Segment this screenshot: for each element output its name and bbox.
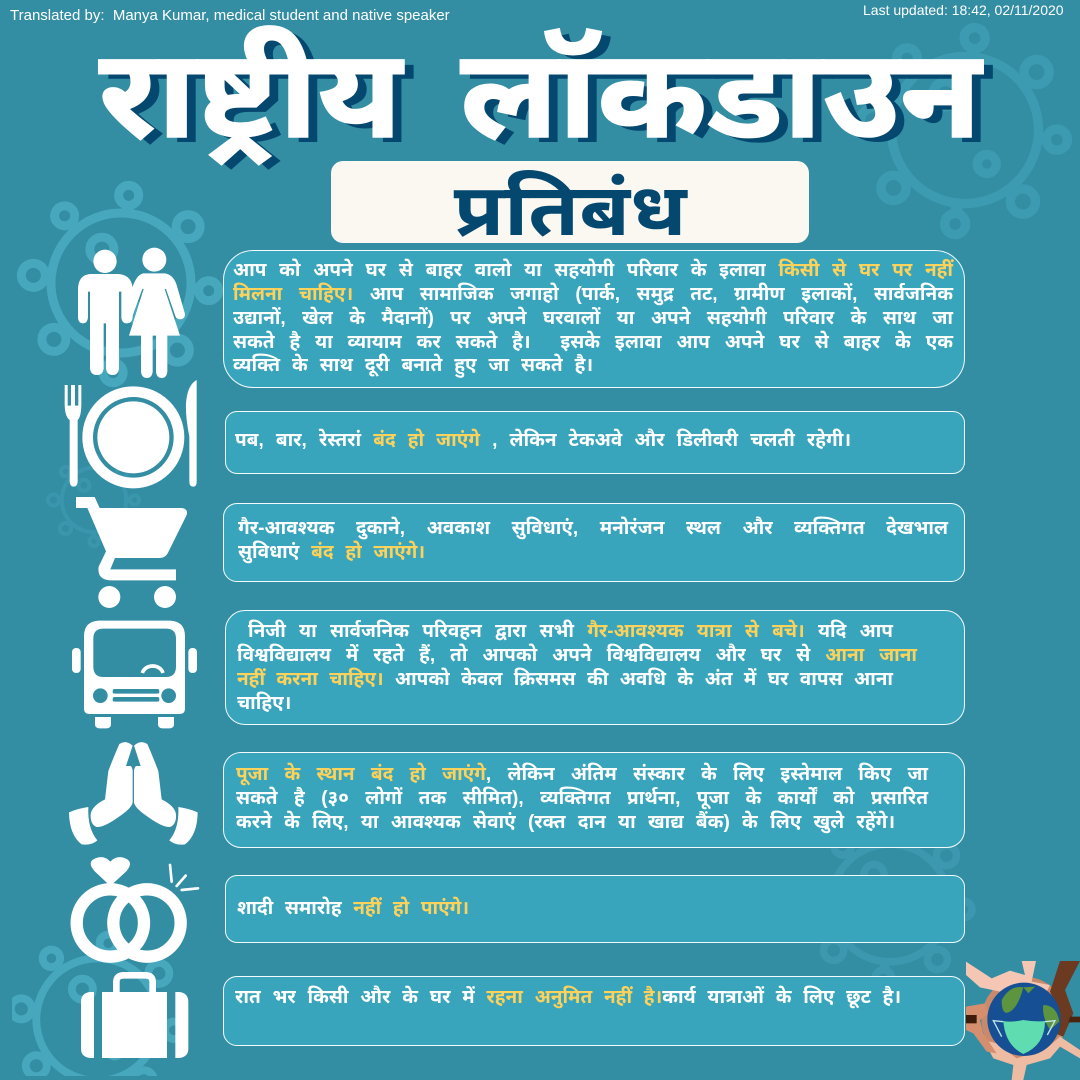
- panel: shops: गैर-आवश्यक दुकाने, अवकाश सुविधाएं, मनोरंजन स्थल और व्यक्तिगत देखभाल: [238, 518, 948, 539]
- icon: bus: [72, 620, 197, 728]
- panel: travel: विश्वविद्यालय में रहते हैं, तो आपको अपने विश्वविद्यालय और घर से आना जाना: [237, 645, 917, 666]
- panel: weddings: [225, 875, 965, 943]
- title: राष्ट्रीय लॉकडाउन: [99, 26, 981, 164]
- subtitle banner: [331, 161, 809, 243]
- icon: wedding rings: [70, 857, 200, 963]
- panel: pubs and restaurants: [225, 411, 965, 474]
- panel: pubs and restaurants: पब, बार, रेस्तरां बंद हो जाएंगे , लेकिन टेकअवे और डिलीवरी चलती रहेगी।: [235, 430, 851, 451]
- icon: couple: [78, 248, 185, 378]
- subtitle banner: प्रतिबंध: [454, 171, 686, 251]
- panel: shops: सुविधाएं बंद हो जाएंगे।: [238, 542, 425, 563]
- icon: shopping cart: [76, 497, 187, 608]
- icon: plate and cutlery: [64, 380, 197, 488]
- panel: travel: चाहिए।: [237, 693, 291, 714]
- panel: overnight stays: [223, 976, 965, 1046]
- translator credit: Translated by: Manya Kumar, medical student and native speaker: [10, 7, 450, 24]
- panel: places of worship: [223, 752, 965, 848]
- panel: travel: [225, 610, 965, 725]
- icon: praying hands: [69, 742, 198, 845]
- panel: shops: [223, 503, 965, 582]
- panel: travel: निजी या सार्वजनिक परिवहन द्वारा सभी गैर-आवश्यक यात्रा से बचे। यदि आप: [248, 621, 893, 642]
- panel: places of worship: सकते है (३० लोगों तक सीमित), व्यक्तिगत प्रार्थना, पूजा के कार्यों को प्रसारित: [236, 788, 928, 809]
- last updated stamp: Last updated: 18:42, 02/11/2020: [863, 2, 1064, 18]
- panel: meeting people: सकते है या व्यायाम कर सकते है। इसके इलावा आप अपने घर से बाहर के एक: [233, 332, 953, 353]
- panel: meeting people: आप को अपने घर से बाहर वालो या सहयोगी परिवार के इलावा किसी से घर पर नहीं: [233, 260, 953, 281]
- panel: meeting people: व्यक्ति के साथ दूरी बनाते हुए जा सकते है।: [233, 355, 593, 376]
- panel: places of worship: करने के लिए, या आवश्यक सेवाएं (रक्त दान या खाद्य बैंक) के लिए खुले रहेंगे।: [236, 812, 895, 833]
- panel: meeting people: [223, 250, 965, 388]
- illustration: globe wearing mask held by hands: [966, 961, 1080, 1080]
- icon: suitcase: [81, 972, 188, 1058]
- panel: meeting people: मिलना चाहिए। आप सामाजिक जगाहो (पार्क, समुद्र तट, ग्रामीण इलाकों, सार्वजनिक: [233, 284, 953, 305]
- panel: meeting people: उद्यानों, खेल के मैदानों) पर अपने घरवालों या अपने सहयोगी परिवार के साथ जा: [233, 308, 953, 329]
- panel: travel: नहीं करना चाहिए। आपको केवल क्रिसमस की अवधि के अंत में घर वापस आना: [237, 669, 893, 690]
- panel: weddings: शादी समारोह नहीं हो पाएंगे।: [237, 898, 469, 919]
- panel: overnight stays: रात भर किसी और के घर में रहना अनुमित नहीं है।कार्य यात्राओं के लिए छूट है।: [235, 987, 901, 1008]
- panel: places of worship: पूजा के स्थान बंद हो जाएंगे, लेकिन अंतिम संस्कार के लिए इस्तेमाल किए जा: [236, 764, 928, 785]
